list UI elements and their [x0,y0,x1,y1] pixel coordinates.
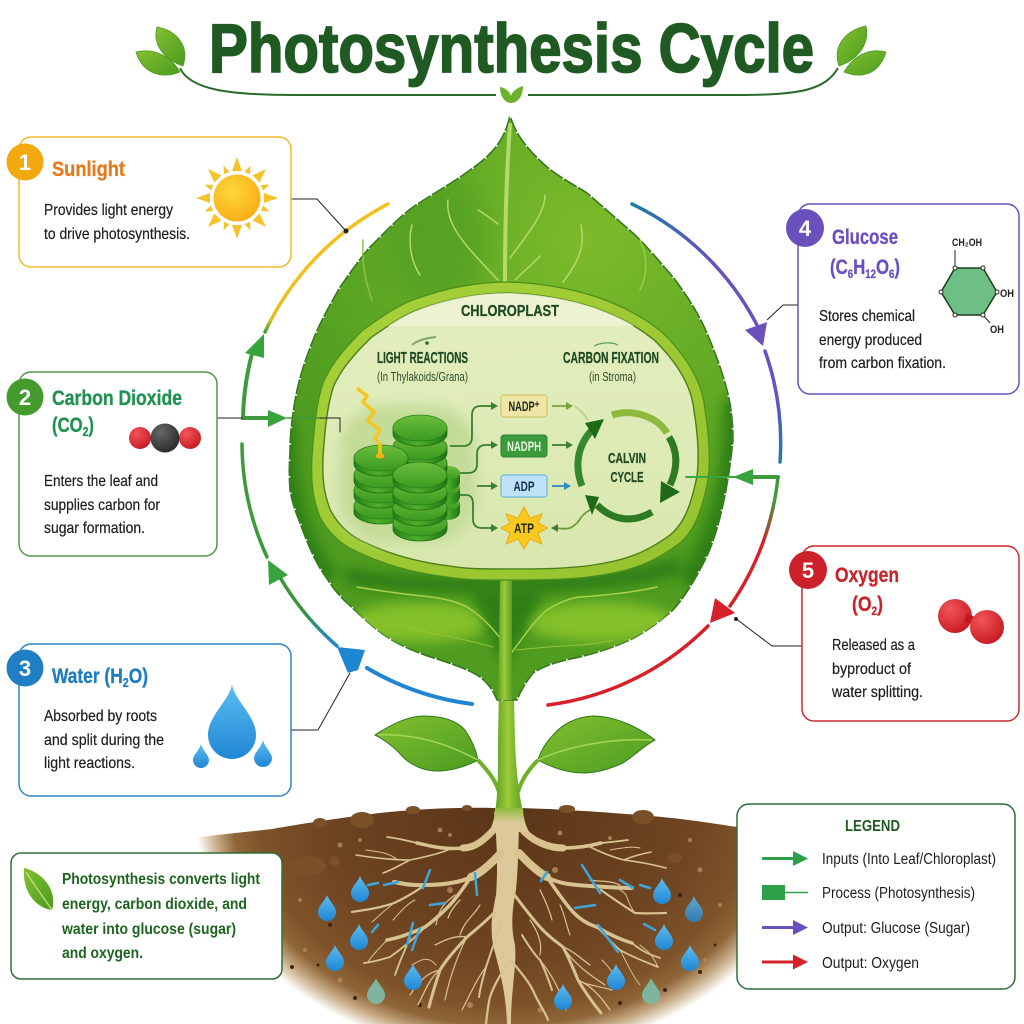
badge 4: 4 [799,216,812,241]
title text: Photosynthesis Cycle [209,10,814,87]
glucose heading: (C [830,256,852,279]
glucose heading: O [876,256,889,279]
icon: glucose hexagon [939,237,1014,336]
panel 3: water [6,644,291,796]
oxygen heading [835,564,899,618]
title vine and leaves [136,26,886,103]
water text: light reactions. [44,755,135,772]
badge 5 [789,551,827,589]
legend: oxygen: Output: Oxygen [822,955,919,972]
carbon dioxide heading: ) [88,414,94,437]
oxygen text: Released as a [832,637,915,654]
oxygen heading: (O [852,593,875,616]
glucose text: energy produced [819,332,922,349]
carbon dioxide heading [52,387,182,439]
stem [495,575,523,812]
panel 1: sunlight [6,137,291,267]
outer membrane [312,282,709,580]
ADP box: ADP [514,478,534,494]
carbon dioxide heading: (CO [52,414,90,437]
carbon dioxide text: sugar formation. [44,520,145,537]
glucose text: Stores chemical [819,308,915,325]
small left leaf [375,716,499,792]
badge 1 [6,144,44,180]
stem base [489,808,529,832]
carbon fixation heading: (in Stroma) [589,370,636,384]
carbon dioxide heading: Carbon Dioxide [52,387,182,410]
water heading: O) [129,665,148,688]
glucose text: from carbon fixation. [819,355,946,372]
Calvin cycle [578,413,680,519]
summary text: energy, carbon dioxide, and [62,896,247,913]
ATP star: ATP [514,520,534,536]
oxygen text: water splitting. [831,684,923,701]
legend: glucose [762,920,970,937]
badge 2: 2 [19,385,31,410]
leader lines [217,199,802,730]
water droplets [318,876,703,1010]
water text: and split during the [44,732,164,749]
sunlight text: to drive photosynthesis. [44,226,190,243]
soil and roots [190,805,815,1024]
icon: sun [196,157,278,239]
glucose heading: 12 [865,267,876,281]
carbon fixation heading [563,343,659,384]
output green line [686,469,778,485]
water input arc [242,444,472,704]
sunlight text [44,202,190,243]
icon: glucose hexagon: OH [1000,288,1014,300]
carbon dioxide text: Enters the leaf and [44,473,158,490]
leaf shading [284,170,738,670]
carbon fixation heading: CARBON FIXATION [563,350,659,367]
chloroplast label: CHLOROPLAST [461,303,559,320]
summary text: Photosynthesis converts light [62,871,261,888]
carbon dioxide arc with arrow [243,334,340,432]
water text [44,708,164,772]
oxygen text: byproduct of [832,661,911,678]
summary panel [11,853,282,979]
leaf serrated edge [289,115,733,700]
Calvin cycle: CALVIN [608,450,646,467]
roots [352,812,666,1024]
carbon dioxide text [44,473,161,537]
summary text [61,871,261,962]
icon: glucose hexagon: OH [990,324,1004,336]
legend [737,804,1015,989]
legend: inputs: Inputs (Into Leaf/Chloroplast) [822,851,996,868]
NADP+ box: NADP⁺ [508,398,540,414]
glucose heading: 6 [848,267,853,281]
panel 4: glucose [786,204,1019,394]
icon: oxygen molecule [938,599,1004,644]
sunlight text: Provides light energy [44,202,173,219]
light reactions heading: LIGHT REACTIONS [377,350,468,367]
glucose arc [632,204,781,462]
NADPH box [501,435,547,457]
legend heading: LEGEND [845,818,900,835]
chloroplast [312,282,709,580]
main leaf [284,115,738,700]
icon: water drops [193,685,272,768]
icon: summary leaf [24,868,53,910]
summary text: water into glucose (sugar) [61,921,236,938]
leaf veins [357,125,657,652]
oxygen arc [548,477,778,705]
light reactions heading [377,337,468,384]
oxygen heading: ) [877,593,883,616]
light reactions heading: (In Thylakoids/Grana) [377,370,468,384]
legend: process: Process (Photosynthesis) [822,885,975,902]
small right leaf [518,716,655,792]
glucose heading: H [853,256,865,279]
glucose heading [830,226,900,281]
summary text: and oxygen. [62,945,143,962]
oxygen heading: Oxygen [835,564,899,587]
legend: process [762,885,975,902]
badge 3 [6,650,44,686]
badge 2 [6,378,44,416]
grana stacks [340,405,476,543]
legend: oxygen [762,954,919,972]
top highlight band [388,293,634,326]
panel 2: carbon dioxide [6,372,217,556]
icon: glucose hexagon: CH₂OH [952,237,982,249]
carbon dioxide text: supplies carbon for [44,497,161,514]
ADP box [501,475,547,497]
sunlight heading: Sunlight [52,158,125,181]
soil [190,808,815,1024]
badge 5: 5 [802,558,814,583]
title [136,10,886,103]
badge 1: 1 [19,150,31,175]
cycle arcs [242,204,781,705]
NADPH box: NADPH [507,438,541,454]
water heading: Water (H [52,665,138,688]
icon: CO2 molecule [129,424,201,452]
oxygen text [831,637,923,701]
light energy bolt [357,388,384,458]
sunlight arc [265,204,388,332]
midrib below chloroplast [498,580,512,700]
blue water traces in roots [368,865,655,952]
oxygen heading: 2 [872,604,877,618]
badge 3: 3 [19,656,31,681]
glucose heading: ) [894,256,900,279]
ATP star [501,507,548,549]
legend: glucose: Output: Glucose (Sugar) [822,920,970,937]
badge 4 [786,209,824,247]
glucose heading: Glucose [832,226,898,249]
glucose heading: 6 [889,267,895,281]
glucose text [819,308,946,372]
legend: inputs [762,851,996,868]
water heading: 2 [123,675,129,690]
carbon dioxide heading: 2 [83,424,88,439]
panel 5: oxygen [789,546,1019,721]
water text: Absorbed by roots [44,708,157,725]
connector arrows from grana [450,406,493,528]
NADP+ box [501,395,547,417]
arrows to Calvin cycle [552,406,590,529]
Calvin cycle: CYCLE [610,469,644,486]
